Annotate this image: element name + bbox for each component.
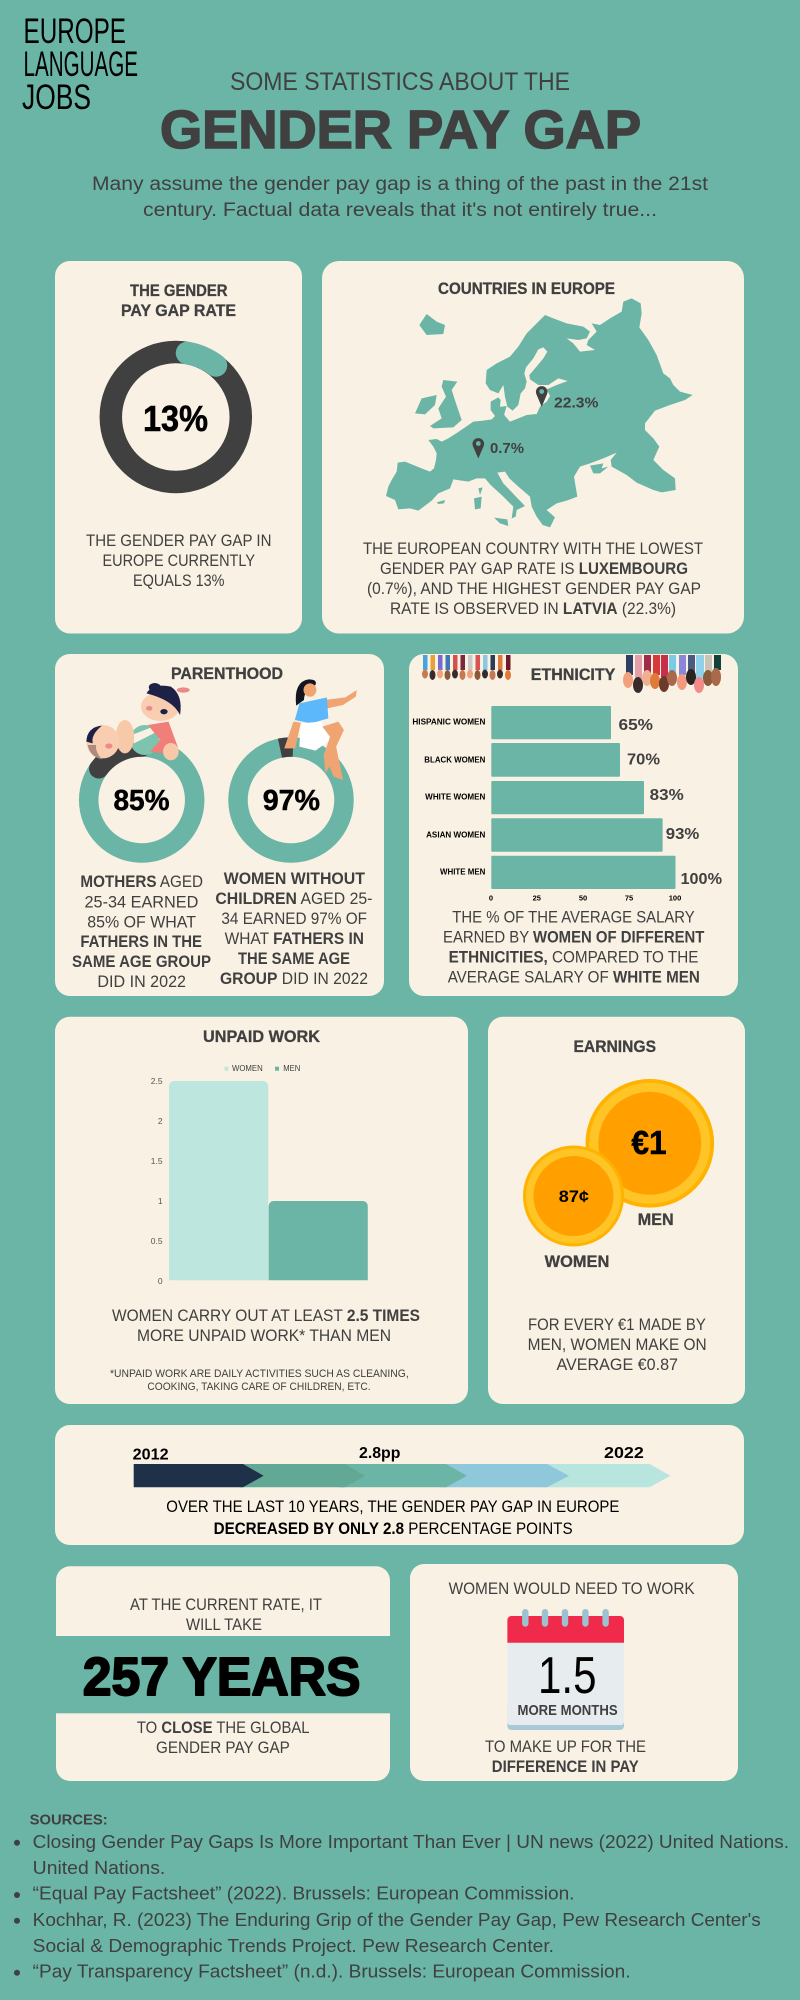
text: at the current rate: AT THE CURRENT RATE, IT — [130, 1596, 322, 1614]
labels: timeline years: 2.8pp — [359, 1445, 401, 1462]
arrow: timeline chevrons — [134, 1464, 670, 1487]
bar chart: salary by ethnicity: 100% — [680, 871, 722, 888]
donut chart: 13% — [111, 352, 241, 482]
heading: earnings: EARNINGS — [574, 1038, 656, 1056]
source list: Social & Demographic Trends Project. Pew Research Center. — [33, 1935, 554, 1956]
text: to make up the difference: DIFFERENCE IN PAY — [492, 1758, 639, 1776]
heading: parenthood: PARENTHOOD — [171, 665, 283, 683]
illustration: woman sitting on ring — [284, 679, 357, 780]
text: mothers — [72, 873, 211, 991]
bar chart: salary by ethnicity: 50 — [579, 894, 587, 903]
text: earnings description — [528, 1316, 707, 1374]
bar chart: salary by ethnicity: 65% — [618, 717, 653, 734]
intro text: century. Factual data reveals that it's not entirely true... — [143, 200, 657, 221]
source list: Kochhar, R. (2023) The Enduring Grip of the Gender Pay Gap, Pew Research Center's — [33, 1909, 761, 1930]
text: mothers: DID IN 2022 — [97, 973, 186, 991]
banner: 257 years: 257 YEARS — [83, 1647, 360, 1707]
text: mothers: 25-34 EARNED — [84, 893, 198, 911]
footnote: unpaid work definition — [110, 1368, 409, 1393]
intro text: Many assume the gender pay gap is a thing of the past in the 21st — [92, 174, 709, 195]
text: gap description: EUROPE CURRENTLY — [102, 552, 255, 570]
source list: “Pay Transparency Factsheet” (n.d.). Brussels: European Commission. — [33, 1961, 631, 1982]
bar chart: salary by ethnicity: 75 — [625, 894, 633, 903]
panel: ethnicity — [409, 654, 738, 996]
source list: United Nations. — [33, 1857, 165, 1878]
text: timeline description — [166, 1498, 619, 1538]
text: lowest and highest countries — [363, 540, 703, 618]
banner: 257 years — [56, 1636, 390, 1713]
map pin: Luxembourg 0.7%: 0.7% — [490, 440, 524, 457]
panel: 257 years — [56, 1566, 390, 1781]
text: gap description — [86, 532, 272, 590]
footnote: unpaid work definition: COOKING, TAKING CARE OF CHILDREN, ETC. — [147, 1381, 371, 1393]
illustration: raised hands right — [623, 655, 721, 693]
footnote: unpaid work definition: *UNPAID WORK ARE DAILY ACTIVITIES SUCH AS CLEANING, — [110, 1368, 409, 1380]
bar chart: salary by ethnicity: 93% — [666, 826, 700, 843]
icon: calendar: 1.5 — [538, 1647, 596, 1705]
text: women without children: 34 EARNED 97% OF — [221, 910, 367, 928]
text: ethnicity description: THE % OF THE AVERAGE SALARY — [452, 909, 695, 927]
label: men: MEN — [638, 1211, 674, 1229]
text: earnings description: FOR EVERY €1 MADE BY — [528, 1316, 706, 1334]
text: to close the gap: TO CLOSE THE GLOBAL — [137, 1719, 310, 1737]
bar chart: unpaid work: 1 — [158, 1196, 163, 1206]
text: at the current rate: WILL TAKE — [186, 1616, 262, 1634]
label: women: WOMEN — [545, 1253, 609, 1271]
text: ethnicity description: EARNED BY WOMEN OF DIFFERENT — [443, 929, 704, 947]
heading: the gender pay gap rate: PAY GAP RATE — [121, 302, 236, 320]
icon: calendar — [507, 1609, 624, 1730]
title block: SOME STATISTICS ABOUT THE — [230, 68, 570, 96]
text: women without children: GROUP DID IN 2022 — [220, 970, 368, 988]
text: timeline description: DECREASED BY ONLY 2.8 PERCENTAGE POINTS — [214, 1520, 573, 1538]
text: women without children: CHILDREN AGED 25- — [215, 890, 372, 908]
coin: men €1 — [586, 1079, 714, 1208]
bar chart: salary by ethnicity: 25 — [533, 894, 541, 903]
text: mothers: MOTHERS AGED — [80, 873, 203, 891]
source list: “Equal Pay Factsheet” (2022). Brussels: European Commission. — [33, 1883, 574, 1904]
labels: timeline years: 2022 — [604, 1445, 644, 1462]
legend: MEN — [283, 1064, 301, 1073]
text: to make up the difference: TO MAKE UP FOR THE — [485, 1738, 646, 1756]
text: lowest and highest countries: GENDER PAY GAP RATE IS LUXEMBOURG — [380, 560, 688, 578]
text: to make up the difference — [485, 1738, 646, 1776]
bar chart: salary by ethnicity: 83% — [650, 787, 684, 804]
coin: women 87¢: 87¢ — [559, 1187, 590, 1206]
bar chart: salary by ethnicity: ASIAN WOMEN — [426, 831, 486, 840]
text: earnings description: AVERAGE €0.87 — [556, 1356, 678, 1374]
bar chart: unpaid work: 2 — [158, 1116, 163, 1126]
source list: Closing Gender Pay Gaps Is More Important Than Ever | UN news (2022) United Nations. — [33, 1831, 789, 1852]
legend — [225, 1064, 301, 1073]
map of Europe — [386, 298, 693, 527]
labels: timeline years — [133, 1445, 644, 1463]
text: unpaid work description: MORE UNPAID WORK* THAN MEN — [137, 1327, 391, 1345]
bar chart: unpaid work — [151, 1076, 368, 1286]
logo: Europe Language Jobs: EUROPE — [24, 12, 126, 51]
text: mothers: SAME AGE GROUP — [72, 953, 211, 971]
donut chart: mothers 85% — [89, 747, 195, 853]
text: lowest and highest countries: (0.7%), AND THE HIGHEST GENDER PAY GAP — [367, 580, 701, 598]
text: women without children: WOMEN WITHOUT — [224, 870, 365, 888]
text: earnings description: MEN, WOMEN MAKE ON — [528, 1336, 707, 1354]
bar chart: salary by ethnicity: 100 — [669, 894, 681, 903]
heading: ethnicity: ETHNICITY — [531, 666, 615, 684]
sources — [14, 1812, 789, 1982]
logo: Europe Language Jobs: JOBS — [22, 78, 91, 117]
heading: the gender pay gap rate — [121, 282, 236, 320]
title block — [160, 68, 641, 160]
text: lowest and highest countries: RATE IS OBSERVED IN LATVIA (22.3%) — [390, 600, 676, 618]
text: women would need to work: WOMEN WOULD NEED TO WORK — [449, 1580, 695, 1598]
heading: unpaid work: UNPAID WORK — [203, 1028, 320, 1046]
text: mothers: 85% OF WHAT — [87, 913, 196, 931]
text: unpaid work description — [112, 1307, 420, 1345]
bar chart: unpaid work: 2.5 — [151, 1076, 163, 1086]
bar chart: salary by ethnicity: WHITE WOMEN — [425, 793, 486, 802]
coin: men €1: €1 — [631, 1124, 667, 1161]
heading: sources: SOURCES: — [30, 1812, 108, 1829]
heading: the gender pay gap rate: THE GENDER — [130, 282, 228, 300]
source list — [14, 1831, 789, 1982]
bar chart: salary by ethnicity: BLACK WOMEN — [424, 756, 486, 765]
text: women without children: THE SAME AGE — [238, 950, 350, 968]
panel: parenthood — [55, 654, 384, 996]
bar chart: salary by ethnicity: 0 — [489, 894, 493, 903]
bar chart: salary by ethnicity — [412, 706, 722, 903]
bar chart: salary by ethnicity: 70% — [627, 752, 660, 769]
text: ethnicity description: ETHNICITIES, COMPARED TO THE — [449, 949, 698, 967]
legend: WOMEN — [232, 1064, 263, 1073]
illustration: raised hands left — [422, 655, 511, 680]
donut chart: women without children 97% — [238, 747, 344, 853]
panel: gender pay gap rate — [55, 261, 302, 634]
donut chart: mothers 85%: 85% — [114, 785, 170, 817]
text: women without children — [215, 870, 372, 988]
text: to close the gap: GENDER PAY GAP — [156, 1739, 290, 1757]
text: gap description: EQUALS 13% — [133, 572, 225, 590]
panel: 1.5 more months — [410, 1564, 738, 1781]
text: mothers: FATHERS IN THE — [80, 933, 202, 951]
title block: GENDER PAY GAP — [160, 100, 641, 160]
text: ethnicity description — [443, 909, 704, 987]
logo: Europe Language Jobs: LANGUAGE — [24, 45, 138, 84]
text: women without children: WHAT FATHERS IN — [225, 930, 364, 948]
panel: ten-year timeline — [55, 1425, 744, 1545]
text: at the current rate — [130, 1596, 322, 1634]
bar chart: unpaid work: 0.5 — [151, 1236, 163, 1246]
map pin: Latvia 22.3%: 22.3% — [554, 395, 598, 412]
coin: women 87¢ — [523, 1146, 624, 1246]
bar chart: salary by ethnicity: HISPANIC WOMEN — [412, 718, 486, 727]
bar chart: unpaid work: 0 — [158, 1276, 163, 1286]
text: timeline description: OVER THE LAST 10 YEARS, THE GENDER PAY GAP IN EUROPE — [166, 1498, 619, 1516]
intro text — [92, 174, 709, 221]
donut chart: women without children 97%: 97% — [263, 785, 320, 817]
bar chart: unpaid work: 1.5 — [151, 1156, 163, 1166]
text: unpaid work description: WOMEN CARRY OUT AT LEAST 2.5 TIMES — [112, 1307, 420, 1325]
icon: calendar: MORE MONTHS — [518, 1702, 618, 1719]
panel: unpaid work — [55, 1017, 468, 1404]
text: ethnicity description: AVERAGE SALARY OF WHITE MEN — [448, 969, 700, 987]
text: gap description: THE GENDER PAY GAP IN — [86, 532, 272, 550]
panel: earnings — [488, 1017, 745, 1404]
map pin: Luxembourg 0.7% — [472, 438, 524, 458]
text: lowest and highest countries: THE EUROPEAN COUNTRY WITH THE LOWEST — [363, 540, 703, 558]
panel: countries in Europe — [322, 261, 744, 634]
labels: timeline years: 2012 — [133, 1446, 169, 1463]
illustration: babies — [86, 683, 190, 760]
bar chart: salary by ethnicity: WHITE MEN — [440, 868, 486, 877]
logo: Europe Language Jobs — [22, 12, 138, 117]
text: to close the gap — [137, 1719, 310, 1757]
heading: countries in Europe: COUNTRIES IN EUROPE — [438, 280, 615, 298]
map pin: Latvia 22.3% — [536, 386, 598, 412]
donut chart: 13%: 13% — [143, 398, 208, 439]
